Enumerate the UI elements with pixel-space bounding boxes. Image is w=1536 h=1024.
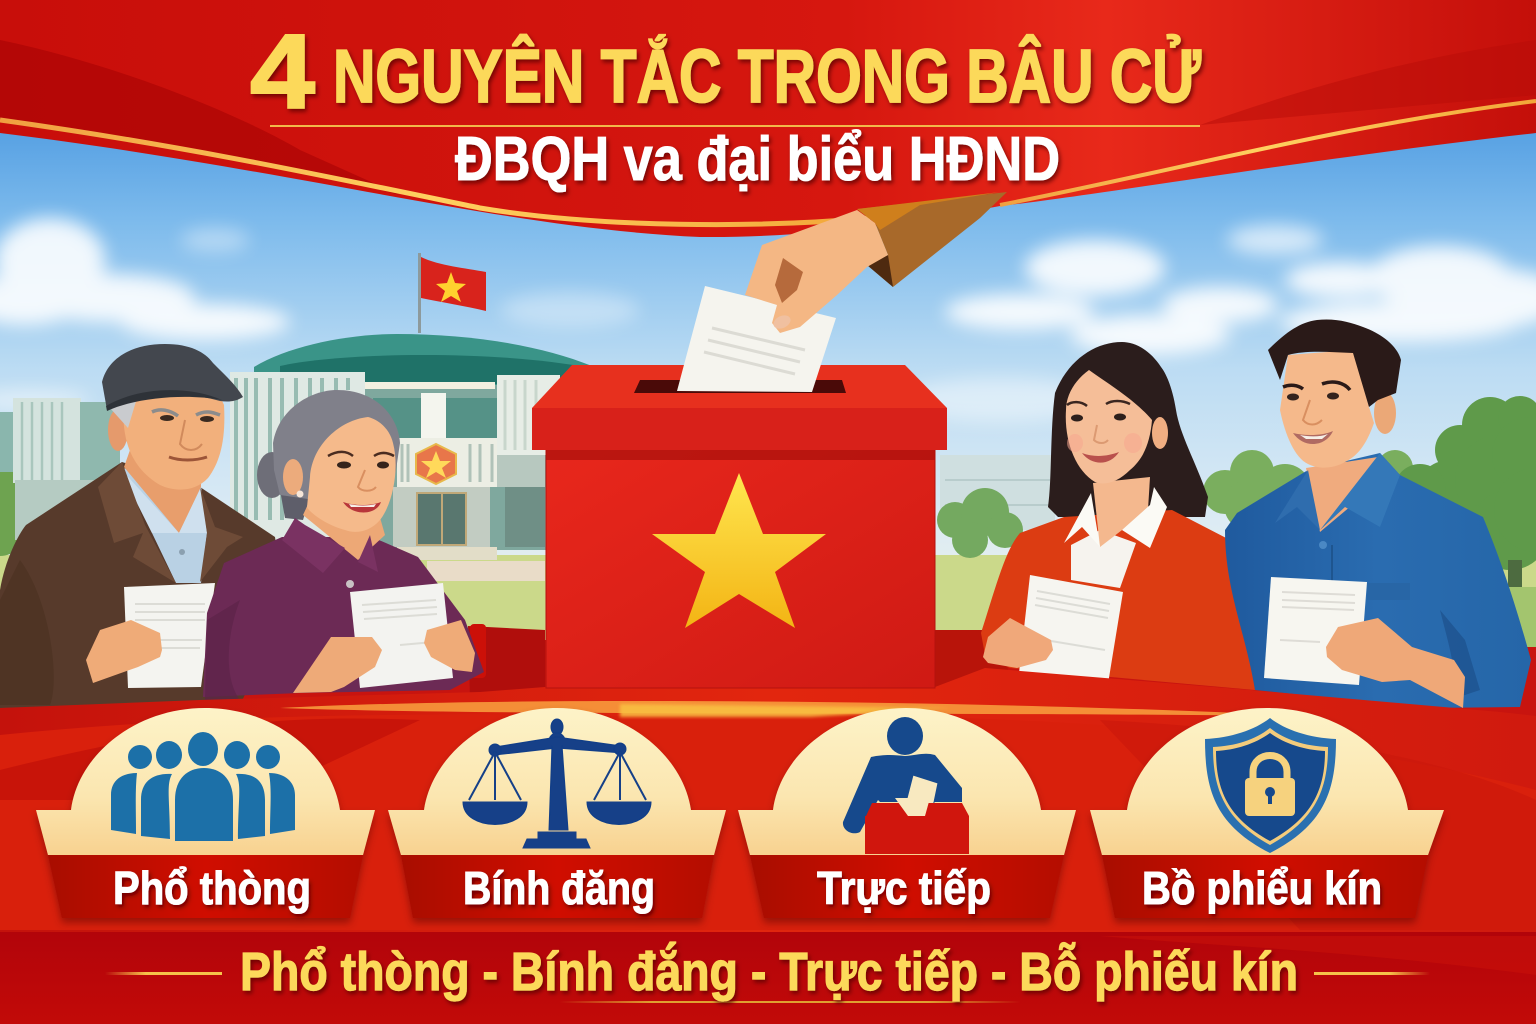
title	[250, 13, 1202, 131]
card: Bỏ phiếu kín	[1090, 708, 1444, 918]
sky background	[0, 100, 1536, 640]
hand	[86, 620, 162, 683]
coat	[0, 462, 285, 708]
label: Trực tiếp	[817, 862, 991, 914]
title: 4	[250, 13, 315, 131]
ballot paper being inserted	[677, 286, 836, 392]
footer text: Phổ thòng - Bính đắng - Trực tiếp - Bỗ phiếu kín	[240, 942, 1298, 1002]
person: young woman	[981, 342, 1255, 690]
ballot	[1019, 575, 1123, 690]
title: NGUYÊN TẮC TRONG BÂU CỬ	[333, 34, 1202, 118]
national assembly building	[0, 334, 592, 581]
ballot	[1264, 577, 1367, 685]
shirt	[1225, 453, 1531, 708]
ballot	[124, 583, 215, 688]
card: Bình đẳng	[388, 708, 726, 918]
head	[1374, 392, 1396, 434]
distant building, trees and grass	[0, 396, 1536, 647]
footer band	[0, 932, 1536, 1024]
table back	[468, 624, 1010, 700]
icon: person voting at box	[843, 717, 969, 854]
arm and hand	[1326, 618, 1465, 708]
blouse	[203, 537, 484, 697]
person: young man	[1225, 319, 1531, 708]
label: Phổ thòng	[113, 862, 311, 914]
top banner	[0, 0, 1536, 237]
ballot	[350, 583, 453, 688]
person: older woman	[203, 390, 484, 700]
jacket	[981, 510, 1255, 690]
icon: shield with padlock	[1205, 718, 1336, 853]
icon: group of people	[111, 732, 295, 841]
label: Bồ phiểu kín	[1142, 862, 1382, 914]
label: Bính đăng	[463, 862, 655, 914]
subtitle: ĐBQH va đại biểu HĐND	[455, 125, 1060, 194]
hand	[983, 618, 1053, 668]
card: Trực tiếp	[738, 708, 1076, 918]
person: older man	[0, 344, 285, 708]
face	[283, 459, 303, 495]
hands	[293, 637, 382, 693]
flag	[418, 253, 486, 333]
card: Phổ thông	[36, 708, 375, 918]
icon: scales of justice	[463, 719, 651, 848]
face	[1152, 417, 1168, 449]
star on box	[652, 473, 826, 628]
hand inserting ballot	[745, 192, 1007, 333]
ballot box	[532, 286, 947, 688]
table and lower red banner	[0, 668, 1536, 1024]
clouds	[0, 218, 1536, 422]
head	[108, 409, 128, 451]
